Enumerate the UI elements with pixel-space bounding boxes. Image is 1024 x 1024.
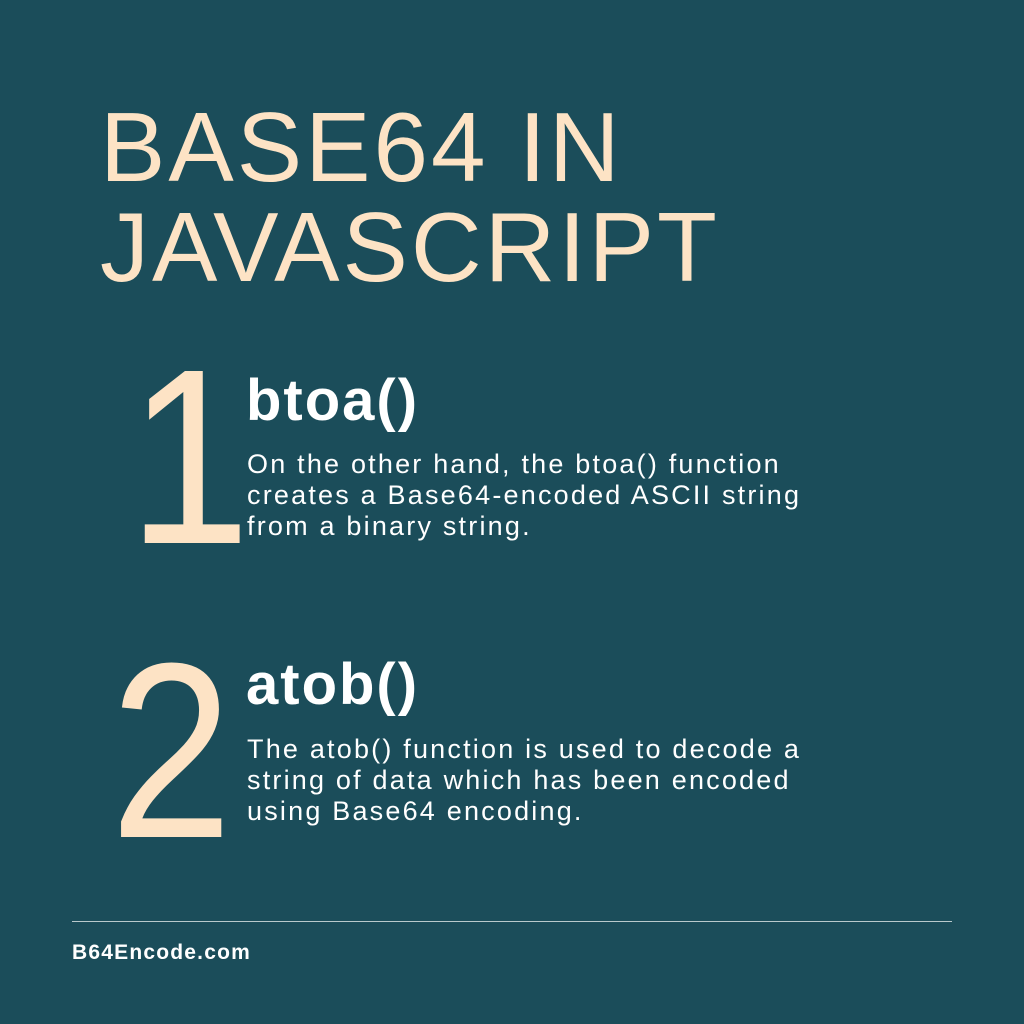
title: BASE64 IN [100, 92, 623, 202]
text: atob description: using Base64 encoding. [247, 796, 584, 826]
text: atob description [247, 734, 801, 826]
text: btoa description [247, 449, 801, 541]
text: atob description: string of data which has been encoded [247, 765, 791, 795]
text: btoa description: creates a Base64-encoded ASCII string [247, 480, 801, 510]
heading: atob: atob() [246, 652, 419, 717]
heading: btoa: btoa() [246, 368, 419, 433]
footer: B64Encode.com [72, 941, 251, 964]
number 2: 2 [110, 611, 232, 890]
title [100, 92, 720, 302]
number 1: 1 [128, 317, 250, 596]
title: JAVASCRIPT [100, 192, 720, 302]
text: atob description: The atob() function is used to decode a [247, 734, 801, 764]
text: btoa description: On the other hand, the btoa() function [247, 449, 781, 479]
text: btoa description: from a binary string. [247, 511, 532, 541]
